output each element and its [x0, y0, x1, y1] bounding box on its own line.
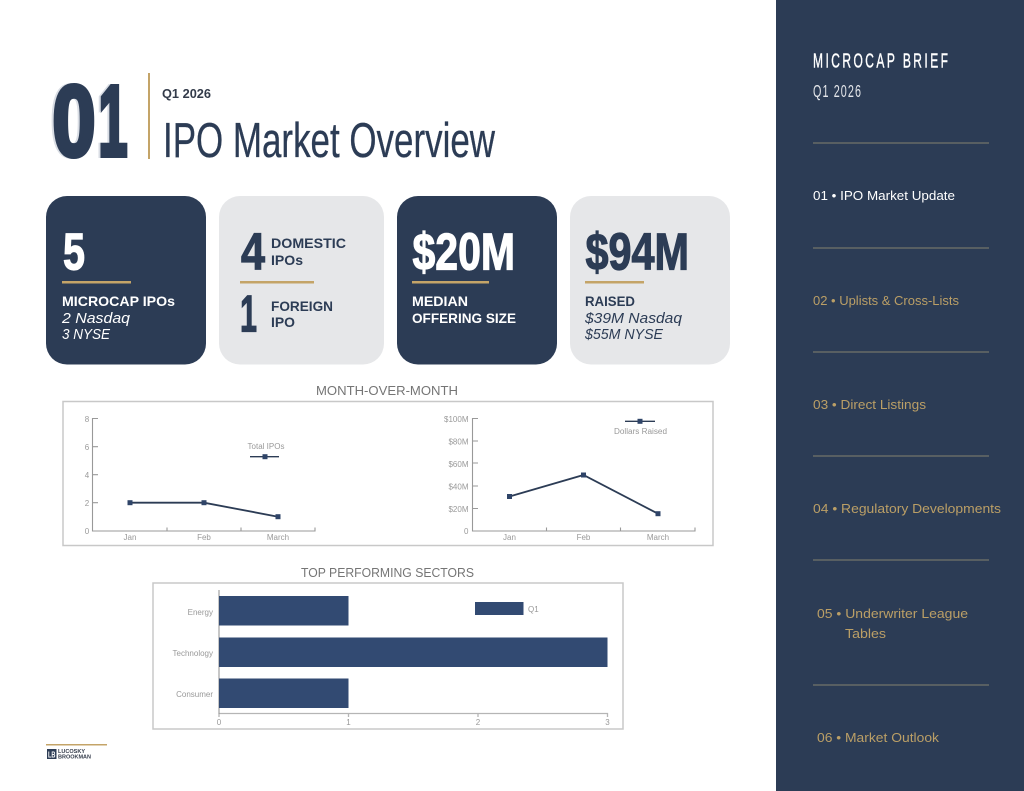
bar chart: top performing sectors: 0: [217, 718, 222, 727]
panel: sidebar: [776, 0, 1024, 791]
nav item 02: 02 • Uplists & Cross-Lists: [813, 293, 959, 308]
panel: dollars raised: $55M NYSE: [584, 327, 663, 343]
legend: dollars raised: [614, 419, 667, 436]
nav item 05: [817, 606, 968, 641]
panel: microcap IPOs: 3 NYSE: [62, 327, 110, 343]
line chart: total IPOs: 2: [85, 499, 90, 508]
panel: median offering size: OFFERING SIZE: [412, 310, 516, 326]
nav item 06: 06 • Market Outlook: [817, 730, 940, 745]
line chart: dollars raised: Jan: [503, 533, 516, 542]
bar chart: top performing sectors: Consumer: [176, 690, 213, 699]
line chart: total IPOs: 0: [85, 527, 90, 536]
bar chart: top performing sectors: [153, 583, 623, 729]
nav item 05: 05 • Underwriter League: [817, 606, 968, 621]
line chart: dollars raised: Feb: [577, 533, 591, 542]
panel: median offering size: MEDIAN: [412, 293, 468, 309]
title: IPO Market Overview: [163, 114, 495, 168]
line chart: total IPOs: 8: [85, 415, 90, 424]
panel: domestic and foreign IPOs: 1: [240, 286, 257, 344]
sidebar date: Q1 2026: [813, 82, 861, 102]
logo: Lucosky Brookman: LUCOSKY: [58, 749, 85, 755]
bar chart: top performing sectors: 1: [346, 718, 351, 727]
legend: Q1: Q1: [528, 605, 539, 614]
panel: domestic and foreign IPOs: IPOs: [271, 252, 303, 268]
panel: dollars raised: $39M Nasdaq: [584, 311, 682, 327]
panel: domestic and foreign IPOs: FOREIGN: [271, 298, 333, 314]
legend: Q1: [475, 602, 539, 615]
panel: domestic and foreign IPOs: [219, 196, 384, 364]
panel: microcap IPOs: 2 Nasdaq: [61, 311, 130, 327]
heading: month-over-month: MONTH-OVER-MONTH: [316, 383, 458, 398]
line chart: total IPOs: Jan: [124, 533, 136, 542]
line chart: dollars raised: 0: [464, 527, 469, 536]
section number: 0: [52, 66, 96, 178]
legend: total IPOs: Total IPOs: [248, 442, 284, 451]
logo: Lucosky Brookman: LB: [48, 750, 56, 760]
line chart: total IPOs: March: [267, 533, 289, 542]
panel: domestic and foreign IPOs: 4: [241, 224, 265, 282]
line chart: dollars raised: $100M: [444, 415, 469, 424]
panel: median offering size: $20M: [412, 224, 515, 282]
sidebar title: MICROCAP BRIEF: [813, 51, 948, 72]
line chart: dollars raised: March: [647, 533, 669, 542]
bar chart: top performing sectors: 2: [476, 718, 481, 727]
section number: 0: [50, 66, 94, 178]
logo: Lucosky Brookman: [46, 744, 107, 760]
nav item 05: Tables: [845, 626, 887, 641]
panel: domestic and foreign IPOs: DOMESTIC: [271, 235, 346, 251]
heading: top performing sectors: TOP PERFORMING SECTORS: [301, 565, 474, 580]
header accent line: [148, 73, 150, 159]
line chart: total IPOs: 4: [85, 471, 90, 480]
panel: dollars raised: RAISED: [585, 293, 635, 309]
panel: microcap IPOs: [46, 196, 206, 364]
panel: median offering size: [397, 196, 557, 364]
line chart: total IPOs: [85, 415, 315, 542]
legend: total IPOs: [248, 442, 284, 459]
panel: microcap IPOs: MICROCAP IPOs: [62, 293, 175, 309]
logo: Lucosky Brookman: BROOKMAN: [58, 754, 91, 760]
nav item 03: 03 • Direct Listings: [813, 397, 927, 412]
bar chart: top performing sectors: Energy: [188, 608, 213, 617]
bar chart: top performing sectors: Technology: [173, 649, 213, 658]
section number: 1: [98, 66, 128, 178]
line chart: dollars raised: $60M: [448, 460, 469, 469]
line chart: total IPOs: Feb: [197, 533, 211, 542]
panel: domestic and foreign IPOs: IPO: [271, 314, 295, 330]
bar chart: top performing sectors: 3: [605, 718, 610, 727]
panel: dollars raised: [570, 196, 730, 364]
legend: dollars raised: Dollars Raised: [614, 427, 667, 436]
panel: dollars raised: $94M: [586, 224, 689, 282]
panel: microcap IPOs: 5: [63, 224, 85, 282]
line chart: dollars raised: $20M: [448, 505, 469, 514]
quarter label: Q1 2026: [162, 86, 211, 101]
line chart: dollars raised: [444, 415, 695, 542]
chart frame: month-over-month: [63, 402, 713, 546]
line chart: dollars raised: $40M: [448, 482, 469, 492]
nav item 01: 01 • IPO Market Update: [813, 188, 955, 203]
nav item 04: 04 • Regulatory Developments: [813, 501, 1002, 516]
section number: 1: [96, 66, 126, 178]
line chart: total IPOs: 6: [85, 443, 90, 452]
line chart: dollars raised: $80M: [448, 438, 469, 446]
